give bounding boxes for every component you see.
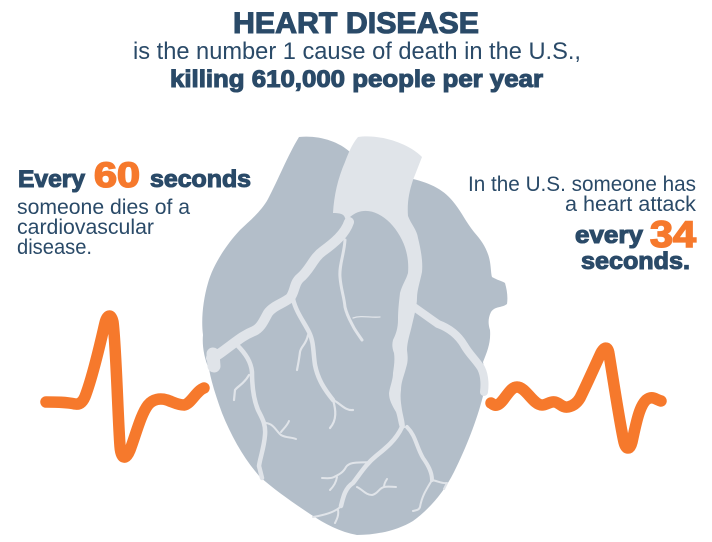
left stat description: disease.	[17, 236, 92, 259]
left coronary trunk	[211, 222, 349, 358]
subtitle bold line: killing 610,000 people per year	[170, 66, 543, 93]
left stat description: someone dies of a	[17, 196, 190, 219]
coronary arteries	[211, 222, 485, 523]
subtitle line: is the number 1 cause of death in the U.S.,	[133, 38, 581, 65]
left stat heading: 60	[94, 156, 140, 195]
right stat description: In the U.S. someone has	[468, 173, 696, 196]
lower left branches	[237, 345, 265, 478]
right stat description	[468, 173, 697, 216]
mid branches	[293, 299, 333, 400]
right coronary branch	[414, 307, 485, 392]
heart body	[202, 137, 507, 535]
aorta and main right artery	[333, 136, 422, 428]
heart illustration	[202, 136, 507, 535]
right stat description: a heart attack	[565, 193, 697, 216]
left stat description: cardiovascular	[17, 216, 154, 239]
right stat emphasis: every	[575, 222, 644, 249]
heartbeat line: left	[46, 316, 204, 457]
left statistic: every 60 seconds	[17, 156, 251, 259]
left stat description	[17, 196, 190, 259]
right statistic: every 34 seconds	[468, 173, 697, 275]
lower central branches	[341, 427, 402, 506]
heartbeat line: right	[491, 348, 661, 448]
right stat emphasis	[575, 214, 696, 275]
right stat emphasis: 34	[650, 214, 696, 255]
title: heart disease: HEART DISEASE	[233, 7, 479, 40]
left stat heading: seconds	[150, 166, 251, 193]
right stat emphasis: seconds.	[581, 248, 690, 275]
left stat heading	[18, 156, 251, 195]
left stat heading: Every	[18, 166, 86, 193]
title block	[133, 7, 581, 93]
